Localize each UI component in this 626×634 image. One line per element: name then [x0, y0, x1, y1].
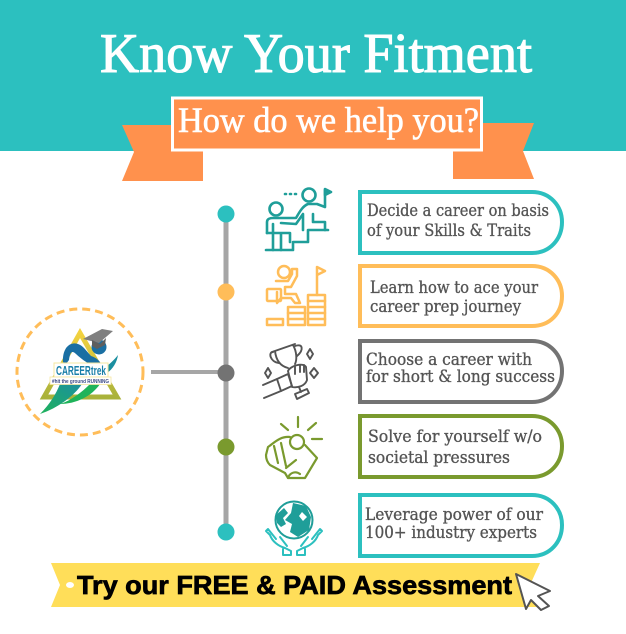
card 1: of your Skills & Traits — [367, 221, 531, 241]
icon: career ladder — [267, 266, 325, 325]
card 2: career prep journey — [370, 297, 521, 317]
ribbon left tail — [122, 125, 203, 181]
icon: cursor arrow — [516, 574, 550, 610]
logo name plate — [54, 363, 108, 377]
card 3: Choose a career with — [366, 350, 532, 370]
logo tagline: #hit the ground RUNNING — [52, 379, 109, 385]
card 3 — [360, 341, 562, 402]
logo tagline plate — [50, 377, 111, 384]
dashed circle — [17, 309, 143, 435]
icon: pointing finger — [266, 417, 322, 478]
subtitle text: How do we help you? — [178, 100, 479, 140]
runner — [63, 343, 103, 369]
card 1 — [360, 192, 562, 253]
card 5 — [360, 495, 562, 556]
subtitle box — [172, 98, 482, 150]
card 1: Decide a career on basis — [367, 201, 549, 221]
timeline connector lines — [151, 214, 228, 532]
title: Know Your Fitment — [100, 23, 532, 85]
icon: hand holding trophy — [263, 344, 318, 399]
ribbon right tail — [453, 123, 534, 179]
card 5: 100+ industry experts — [365, 523, 537, 543]
timeline dots — [218, 206, 234, 540]
card 2: Learn how to ace your — [370, 278, 539, 298]
card 2 — [360, 266, 562, 326]
header band — [0, 0, 626, 151]
logo: CAREERtrek badge — [17, 309, 143, 435]
call to action banner — [51, 563, 540, 607]
triangle — [44, 333, 117, 397]
icon: climbing stairs — [266, 188, 331, 250]
card 5: Leverage power of our — [365, 505, 544, 525]
card 3: for short & long success — [366, 367, 555, 387]
card 4: Solve for yourself w/o — [368, 427, 542, 447]
card 4: societal pressures — [368, 448, 510, 468]
icon: globe in hands — [266, 502, 322, 555]
graduation cap — [83, 329, 113, 343]
call to action banner: Try our FREE & PAID Assessment — [77, 570, 512, 600]
ribbon: subtitle — [122, 98, 534, 181]
card 4 — [360, 416, 562, 477]
logo name: CAREERtrek — [56, 364, 106, 378]
